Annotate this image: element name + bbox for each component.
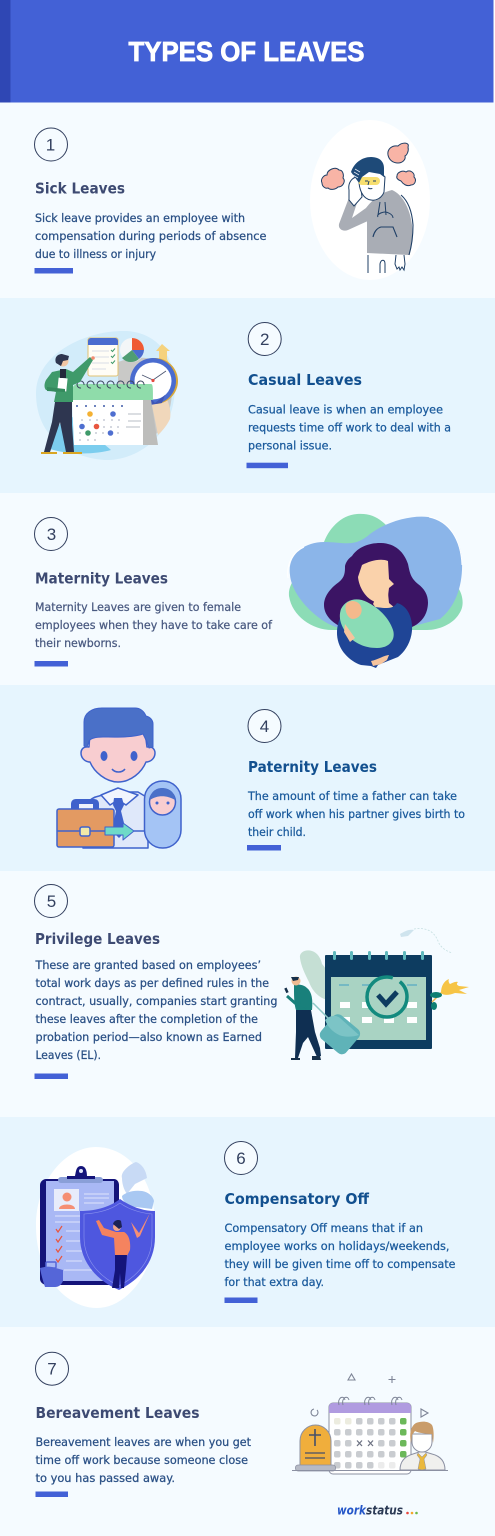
text block: compensatory off description <box>224 1221 456 1289</box>
text block: sick leaves description <box>35 211 266 261</box>
heading: sick leaves: Sick Leaves <box>35 180 125 198</box>
icon: mother holding newborn <box>288 514 463 668</box>
text block: bereavement leaves description: time off work because someone close <box>36 1453 248 1467</box>
text block: privilege leaves description <box>35 958 277 1062</box>
text block: casual leaves description: personal issue. <box>248 438 332 452</box>
text block: maternity leaves description: employees when they have to take care of <box>35 618 273 632</box>
text block: privilege leaves description: total work days as per defined rules in the <box>36 976 269 990</box>
panel: bereavement leaves <box>0 1327 495 1536</box>
heading: paternity leaves: Paternity Leaves <box>248 758 377 776</box>
text block: bereavement leaves description: to you has passed away. <box>36 1471 175 1485</box>
accent bar <box>34 268 73 274</box>
number badge 7: 7 <box>47 1360 57 1379</box>
text block: privilege leaves description: probation period—also known as Earned <box>36 1030 262 1044</box>
text block: casual leaves description: Casual leave is when an employee <box>248 402 443 416</box>
number badge 2: 2 <box>260 330 269 349</box>
number badge 6 <box>224 1142 258 1174</box>
text block: casual leaves description <box>248 402 451 452</box>
icon: calendar, gravestone and mourner <box>292 1374 448 1474</box>
text block: privilege leaves description: contract, usually, companies start granting <box>36 994 278 1008</box>
title: TYPES OF LEAVES <box>128 36 364 67</box>
icon: calendar, traveller and suitcase <box>284 928 469 1060</box>
text block: maternity leaves description: their newborns. <box>35 636 121 650</box>
logo: workstatus: workstatus <box>337 1503 403 1518</box>
header banner <box>0 0 495 102</box>
text block: paternity leaves description: their child. <box>248 825 306 839</box>
text block: sick leaves description: Sick leave provides an employee with <box>35 211 245 225</box>
text block: compensatory off description: they will be given time off to compensate <box>224 1257 456 1271</box>
accent bar <box>36 1492 68 1497</box>
panel: sick leaves <box>0 102 495 298</box>
number badge 4: 4 <box>260 717 269 736</box>
icon: father with briefcase and baby <box>57 708 181 848</box>
text block: bereavement leaves description: Bereavement leaves are when you get <box>36 1435 251 1449</box>
heading: bereavement leaves: Bereavement Leaves <box>36 1404 200 1422</box>
accent bar <box>247 845 281 850</box>
icon: sick man <box>310 120 430 280</box>
heading: maternity leaves: Maternity Leaves <box>35 570 168 588</box>
accent bar <box>34 661 68 666</box>
panel: compensatory off <box>0 1117 495 1327</box>
text block: paternity leaves description <box>247 789 465 839</box>
number badge 4 <box>248 710 281 742</box>
accent bar <box>224 1298 258 1303</box>
panel: maternity leaves <box>0 493 495 685</box>
text block: compensatory off description: employee works on holidays/weekends, <box>224 1239 450 1253</box>
text block: maternity leaves description <box>35 600 273 650</box>
number badge 3 <box>34 518 68 550</box>
number badge 7 <box>36 1352 68 1385</box>
text block: sick leaves description: compensation during periods of absence <box>35 229 266 243</box>
number badge 5 <box>34 884 68 918</box>
number badge 6: 6 <box>236 1149 246 1168</box>
panel: privilege leaves <box>0 871 495 1117</box>
text block: compensatory off description: Compensatory Off means that if an <box>224 1221 423 1235</box>
number badge 2 <box>248 322 281 356</box>
heading: casual leaves: Casual Leaves <box>248 371 362 389</box>
panel: casual leaves <box>0 298 495 493</box>
heading: compensatory off: Compensatory Off <box>224 1190 370 1208</box>
text block: casual leaves description: requests time off work to deal with a <box>248 420 451 434</box>
text block: compensatory off description: for that extra day. <box>224 1275 324 1289</box>
number badge 1: 1 <box>46 136 55 154</box>
text block: paternity leaves description: The amount of time a father can take <box>247 789 457 803</box>
text block: paternity leaves description: off work when his partner gives birth to <box>248 807 465 821</box>
text block: privilege leaves description: These are granted based on employees’ <box>35 958 261 972</box>
text block: privilege leaves description: these leaves after the completion of the <box>36 1012 258 1026</box>
text block: sick leaves description: due to illness or injury <box>35 247 156 261</box>
text block: maternity leaves description: Maternity Leaves are given to female <box>35 600 241 614</box>
heading: privilege leaves: Privilege Leaves <box>35 930 160 948</box>
number badge 5: 5 <box>47 892 56 911</box>
panel: paternity leaves <box>0 685 495 871</box>
text block: bereavement leaves description <box>36 1435 251 1485</box>
number badge 1 <box>34 128 68 161</box>
number badge 3: 3 <box>47 525 56 544</box>
text block: privilege leaves description: Leaves (EL). <box>36 1048 101 1062</box>
icon: clipboard, shield and person <box>36 1147 155 1308</box>
accent bar <box>34 1074 68 1079</box>
accent bar <box>246 463 288 468</box>
icon: man with calendar and clock <box>36 331 178 460</box>
